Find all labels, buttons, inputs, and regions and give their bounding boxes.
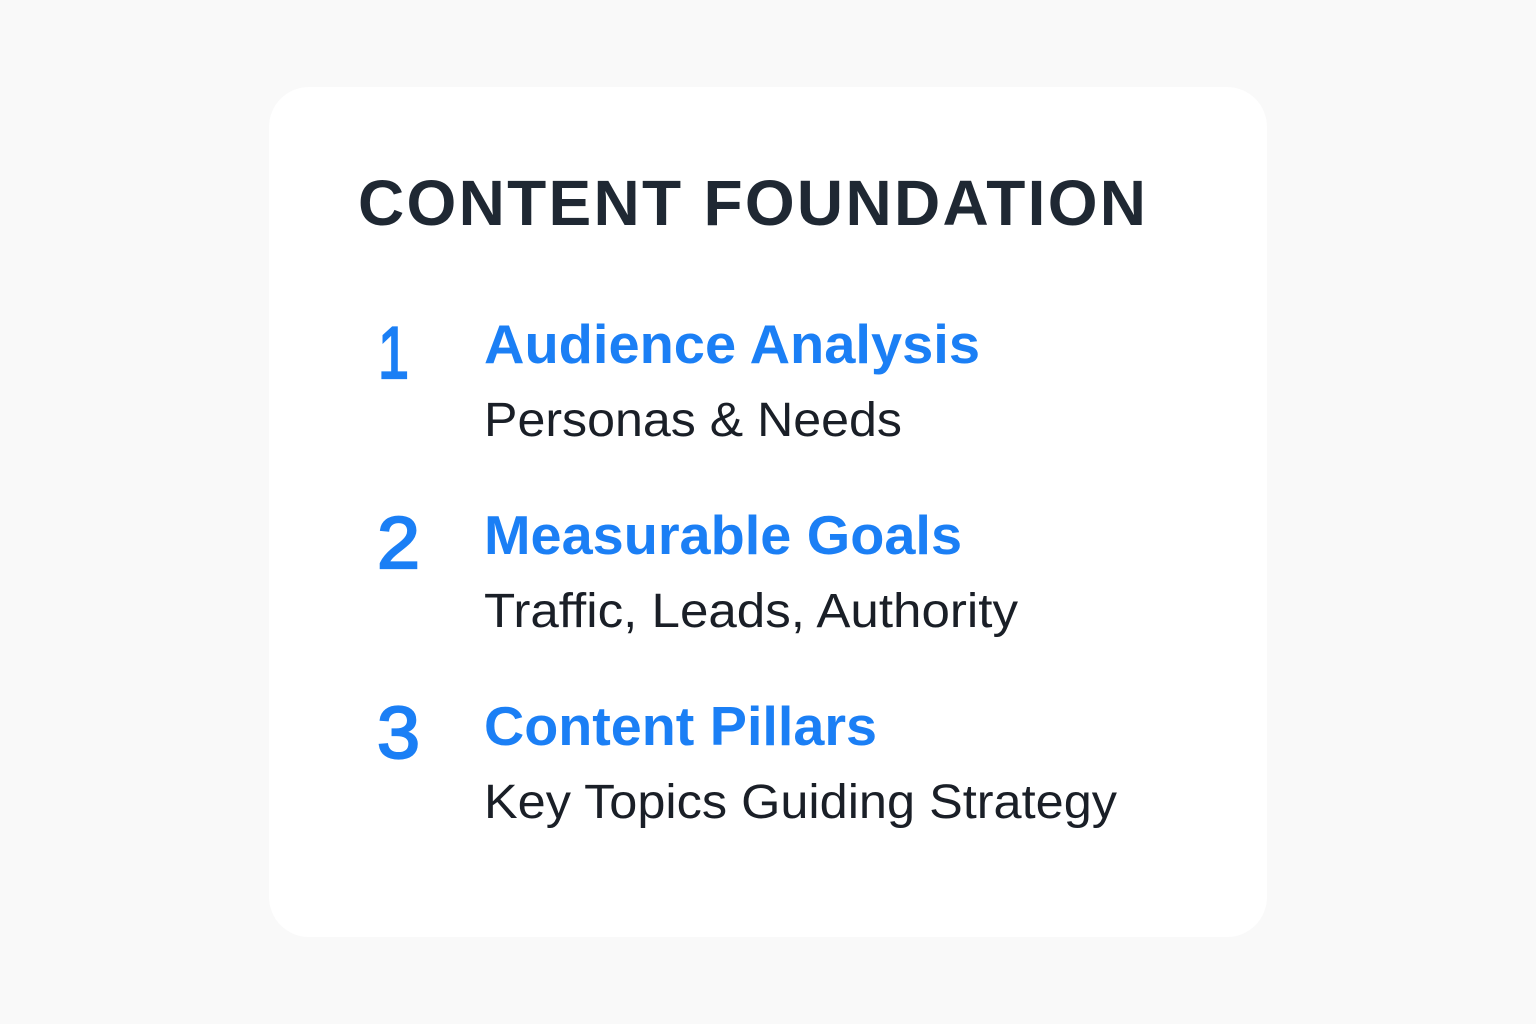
heading: audience analysis: Audience Analysis <box>484 313 980 375</box>
heading: measurable goals: Measurable Goals <box>484 504 962 566</box>
title: CONTENT FOUNDATION <box>358 167 1146 239</box>
panel: content foundation card <box>269 87 1267 937</box>
number 1: 1 <box>378 313 409 394</box>
item 2: measurable goals <box>377 503 1018 638</box>
heading: content pillars: Content Pillars <box>484 695 877 757</box>
number 3: 3 <box>377 693 420 774</box>
description: key topics guiding strategy: Key Topics Guiding Strategy <box>484 776 1117 829</box>
item 1: audience analysis <box>378 313 980 447</box>
description: traffic, leads, authority: Traffic, Leads, Authority <box>484 585 1018 638</box>
description: personas and needs: Personas & Needs <box>484 394 902 447</box>
item 3: content pillars <box>377 693 1117 829</box>
number 2: 2 <box>377 503 420 584</box>
